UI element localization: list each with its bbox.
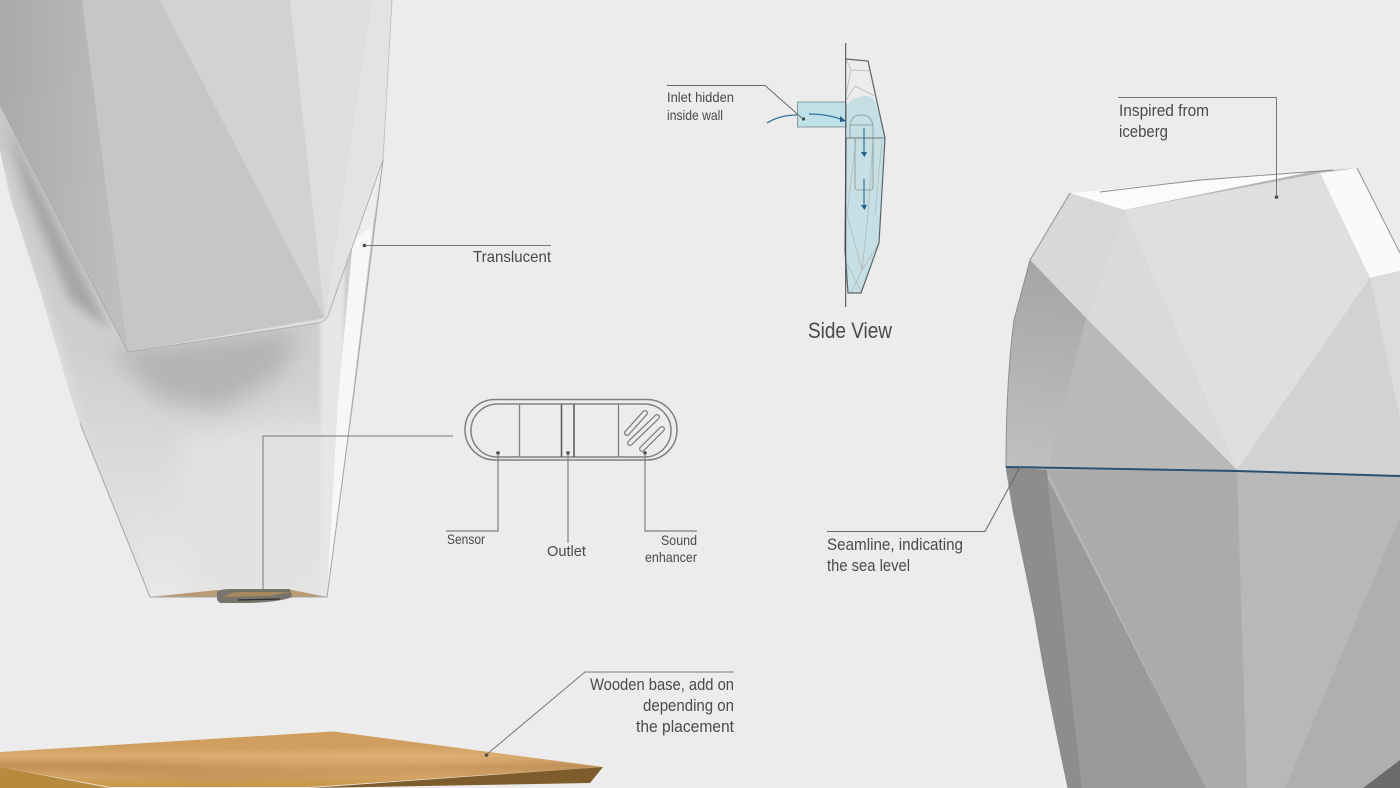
callout: sound enhancer	[643, 451, 697, 565]
arrow heads	[840, 116, 867, 210]
callout: outlet	[547, 451, 587, 560]
callout: sensor	[446, 451, 500, 547]
callout: sound enhancer: enhancer	[645, 549, 697, 565]
callout: inlet: inside wall	[667, 107, 723, 123]
seamline	[1006, 467, 1400, 476]
callout: translucent	[363, 244, 552, 266]
product render: translucent wall unit, left	[0, 0, 400, 603]
upper opaque block	[0, 0, 392, 352]
translucent lower body	[0, 100, 400, 600]
callout: outlet: Outlet	[547, 543, 587, 560]
bottom control disc	[217, 589, 292, 603]
callout: translucent: Translucent	[473, 249, 552, 266]
dividers	[520, 404, 618, 457]
callout: inspired from iceberg: iceberg	[1119, 122, 1168, 141]
wood side faces	[310, 767, 603, 788]
callout: wooden base	[485, 672, 734, 757]
callout: sound enhancer: Sound	[661, 532, 697, 548]
leader from disc to control diagram	[263, 436, 453, 591]
inlet pipe	[798, 102, 846, 127]
callout: seamline	[827, 467, 1020, 575]
outer outline	[845, 59, 885, 293]
wall line	[845, 43, 847, 307]
wooden base	[0, 730, 610, 788]
control panel diagram	[465, 400, 677, 460]
callout: wooden base: the placement	[636, 717, 734, 736]
callout: wooden base: Wooden base, add on	[590, 675, 734, 694]
callout: inspired from iceberg: Inspired from	[1119, 101, 1209, 120]
silhouette	[1006, 168, 1400, 788]
lower facets	[1006, 467, 1082, 788]
speaker slots	[627, 413, 662, 449]
callout: seamline: the sea level	[827, 556, 910, 575]
callout: wooden base: depending on	[643, 696, 734, 715]
water flow arrows	[767, 114, 864, 207]
side view sketch	[767, 43, 892, 343]
product render: faceted iceberg, right	[1006, 168, 1400, 788]
callout: inspired from iceberg	[1118, 98, 1278, 199]
callout: sensor: Sensor	[447, 531, 485, 547]
inner chamber	[850, 115, 873, 190]
pill outline	[465, 400, 677, 460]
body outline	[80, 160, 383, 597]
sketch facet lines	[846, 59, 882, 293]
silhouette edge	[1006, 168, 1400, 788]
wood top surface	[0, 730, 610, 788]
callout: inlet: Inlet hidden	[667, 89, 734, 105]
water fill	[845, 96, 885, 293]
label: side view: Side View	[808, 318, 892, 343]
callout: inlet	[667, 86, 805, 123]
callout: seamline: Seamline, indicating	[827, 535, 963, 554]
upper facets	[1070, 170, 1320, 210]
